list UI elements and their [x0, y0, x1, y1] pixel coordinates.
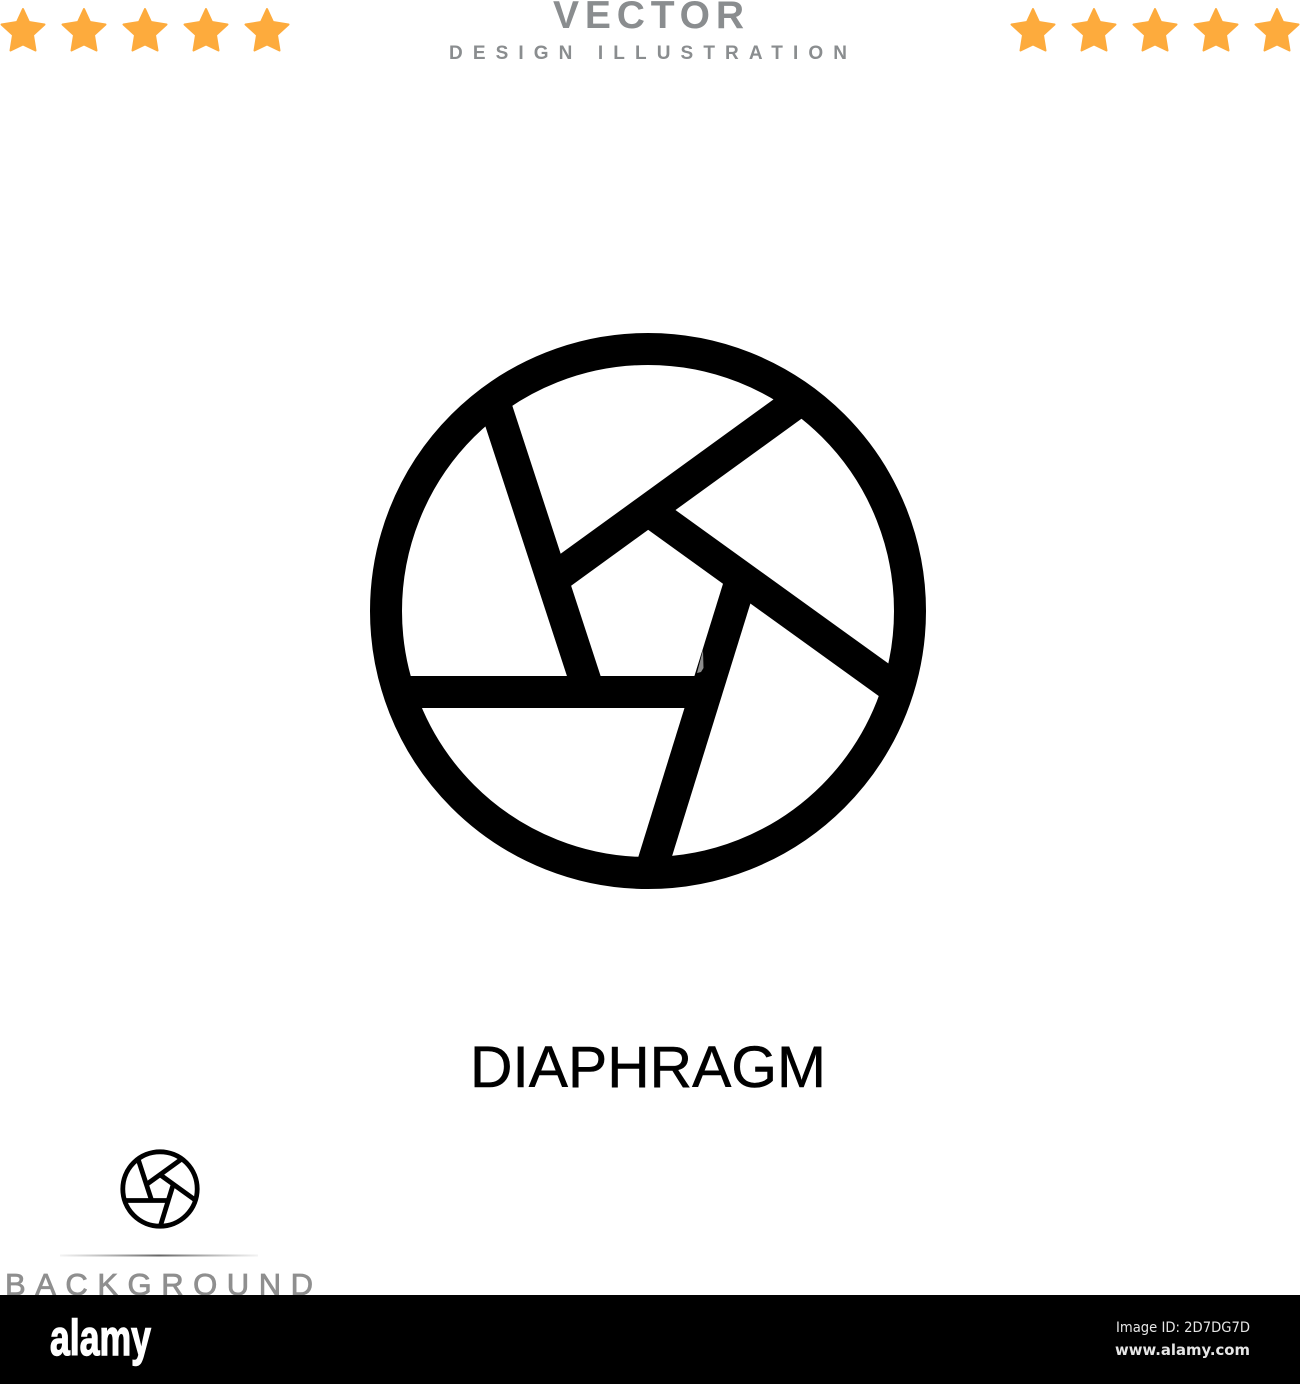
footer text: image id: Image ID: 2D7DG7D: [1116, 1320, 1250, 1336]
icon: small aperture diaphragm: [123, 1152, 197, 1226]
subheading: design illustration: DESIGN ILLUSTRATION: [449, 43, 847, 64]
label: diaphragm: DIAPHRAGM: [470, 1035, 826, 1100]
icon detail: grey smudge: [697, 650, 704, 673]
right star rating: [1012, 9, 1298, 50]
left star rating: [2, 9, 288, 50]
label: background: BACKGROUND: [5, 1267, 313, 1302]
footer bar: [0, 1295, 1300, 1384]
icon: large aperture diaphragm: [386, 349, 910, 873]
footer text: website: www.alamy.com: [1115, 1341, 1250, 1359]
footer logo: alamy: alamy: [50, 1310, 151, 1366]
